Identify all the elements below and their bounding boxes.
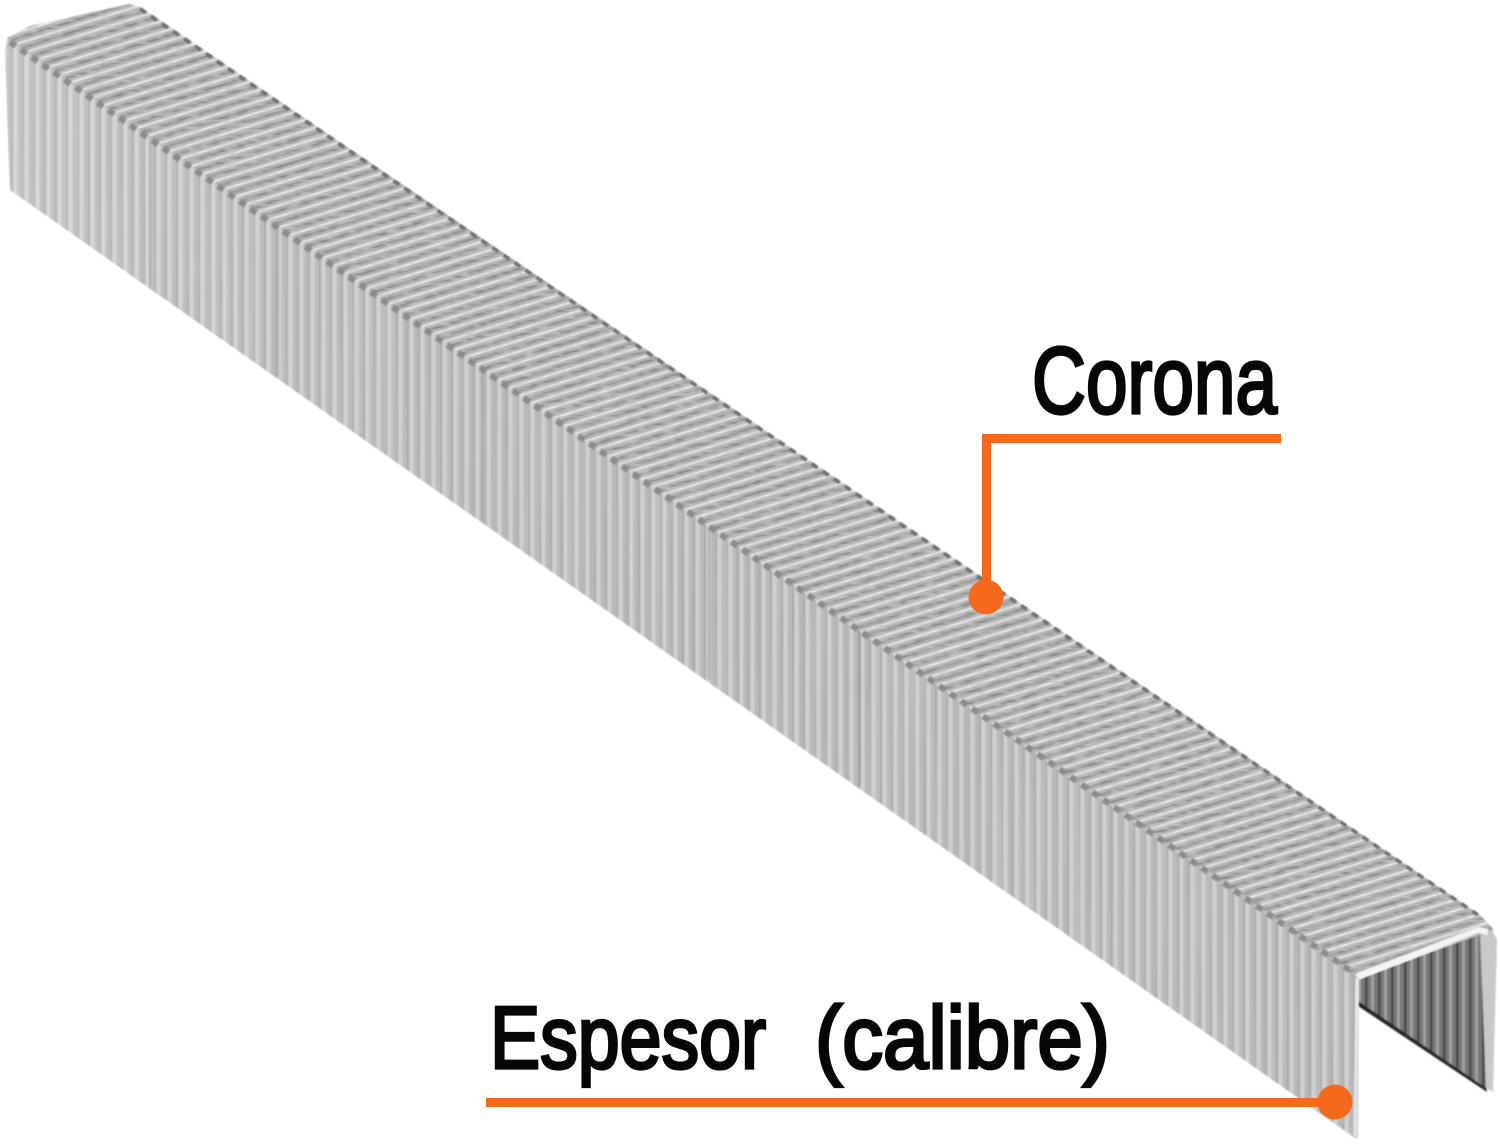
label: (calibre): (calibre) bbox=[815, 988, 1110, 1087]
pack seams bbox=[150, 136, 860, 786]
leader line: Espesor bbox=[486, 1098, 1335, 1107]
callout: Espesor (calibre) bbox=[486, 988, 1352, 1120]
label: Corona: Corona bbox=[1032, 328, 1277, 434]
marker dot: Espesor bbox=[1318, 1084, 1352, 1120]
leader line: Corona bbox=[986, 438, 1281, 597]
far leg interior bbox=[1358, 926, 1497, 1092]
label: Espesor: Espesor bbox=[490, 988, 766, 1087]
callout: Corona bbox=[968, 328, 1281, 614]
marker dot: Corona bbox=[968, 580, 1004, 614]
